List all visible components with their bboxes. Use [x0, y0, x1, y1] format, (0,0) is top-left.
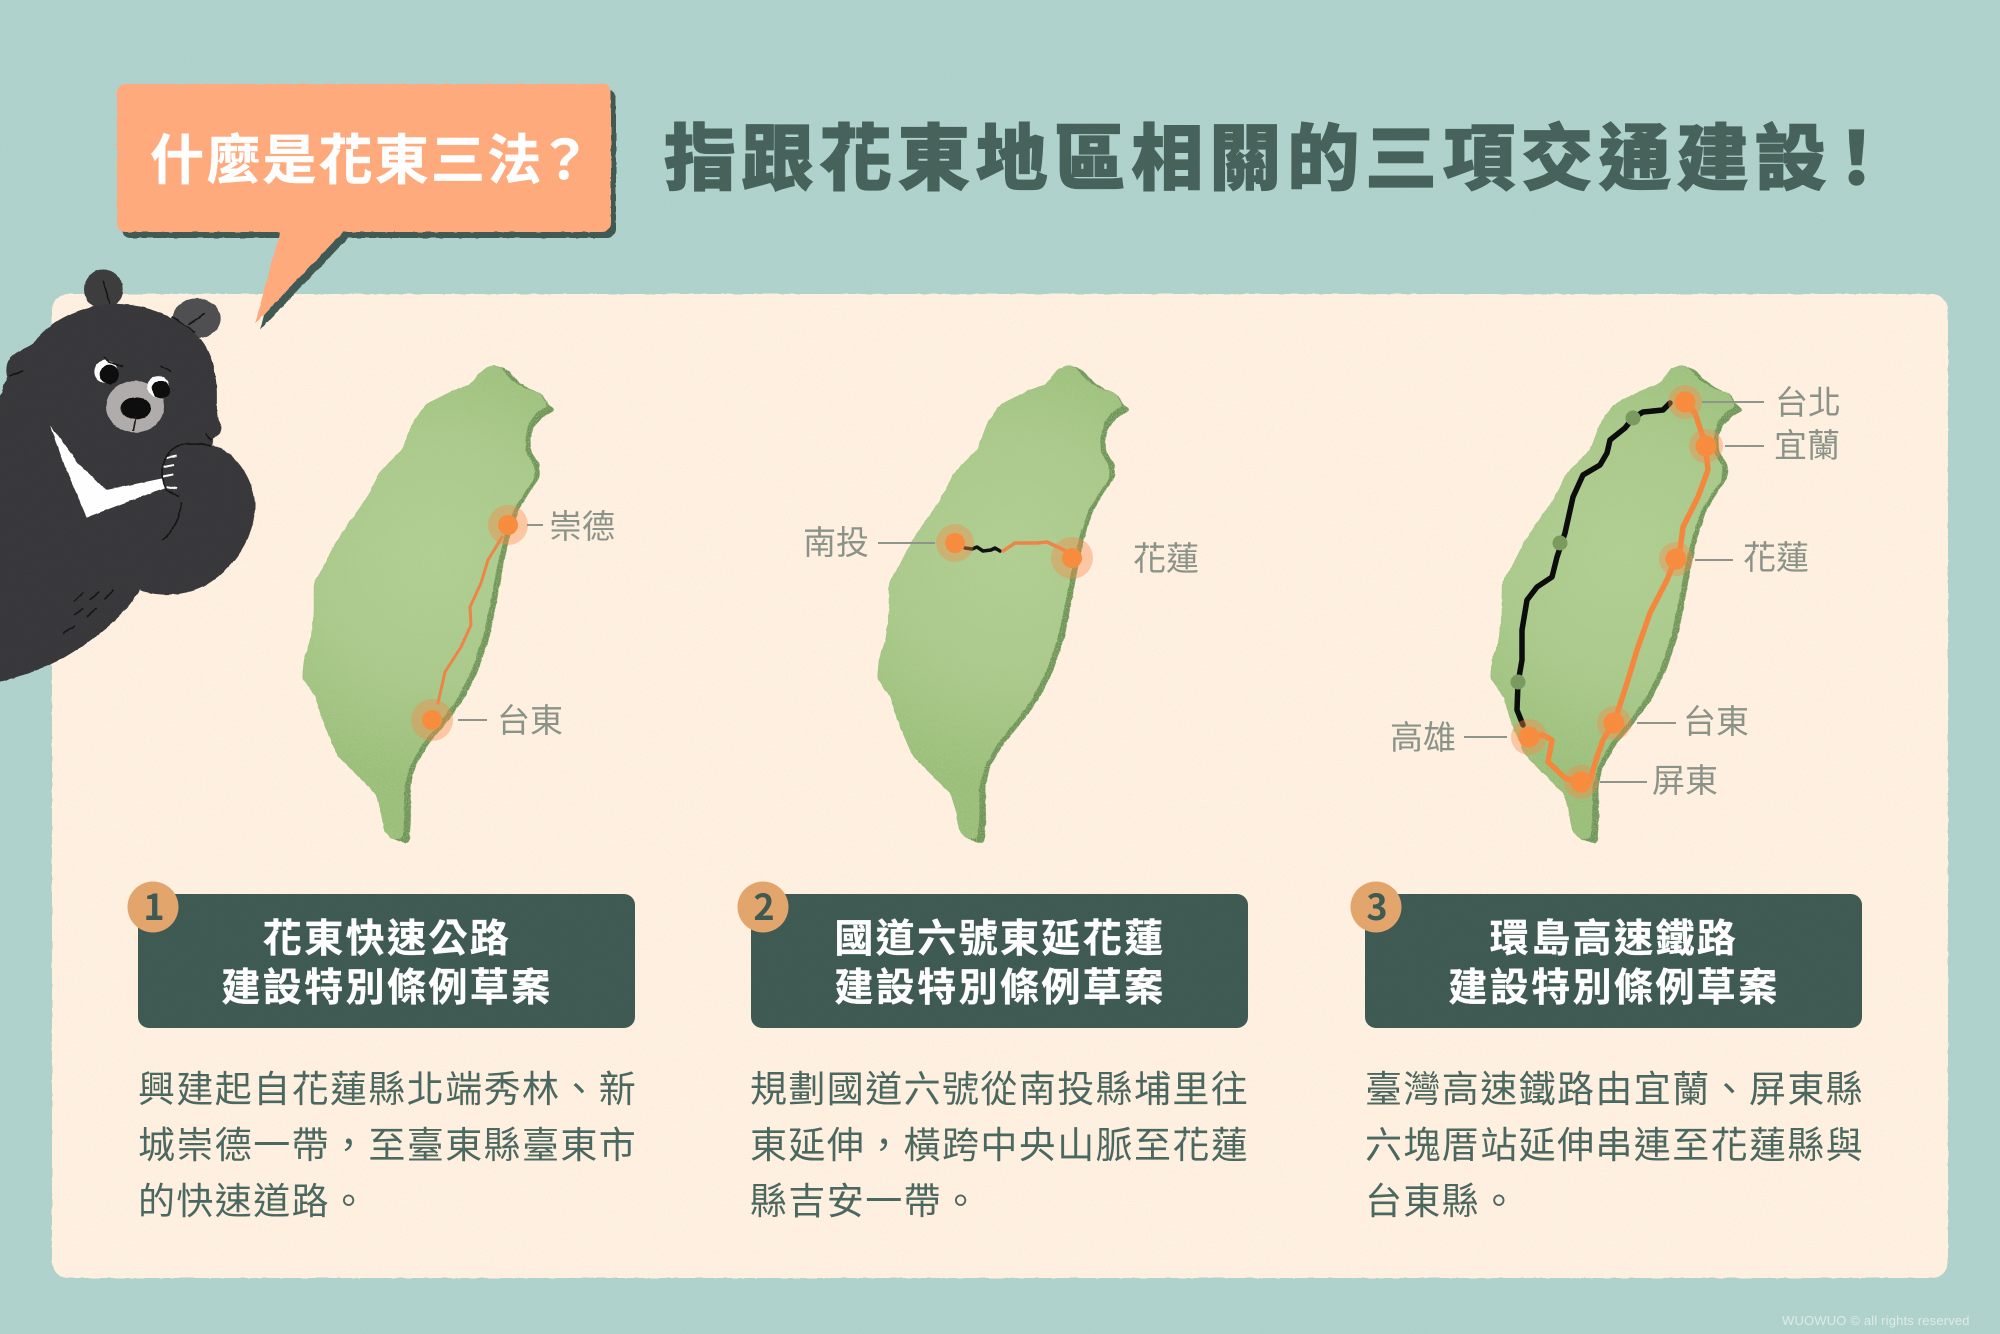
- badge 3: 3: [1366, 879, 1388, 931]
- label: 台東: 台東: [1683, 703, 1749, 740]
- marker: 高雄: [1511, 719, 1547, 755]
- label: 台北: [1702, 384, 1841, 421]
- column 1 heading box: 花東快速公路: [263, 918, 511, 961]
- label: 花蓮: 花蓮: [1743, 539, 1809, 576]
- copyright note: WUOWUO © all rights reserved: [1782, 1313, 1970, 1328]
- column 3 heading box: 建設特別條例草案: [1448, 967, 1780, 1010]
- route: west high speed rail: [1517, 403, 1670, 725]
- column 3 body text: [1365, 1069, 1864, 1222]
- column 2 body text: 縣吉安一帶。: [750, 1181, 980, 1222]
- bear head and body: [0, 304, 255, 685]
- bear paw lines and claws: [62, 444, 212, 633]
- route: 國道六號 tunnel section: [965, 547, 1000, 551]
- column 1 heading box: 建設特別條例草案: [221, 967, 553, 1010]
- label: 南投: 南投: [803, 524, 869, 561]
- bubble text: 什麼是花東三法？: [150, 131, 594, 191]
- route: 花東快速公路: [438, 537, 502, 703]
- badge 2: [738, 879, 788, 932]
- marker: 南投: [936, 524, 974, 562]
- main title: 指跟花東地區相關的三項交通建設！: [664, 120, 1898, 200]
- label: 花蓮: 花蓮: [1133, 540, 1199, 577]
- column 2 body text: 東延伸，橫跨中央山脈至花蓮: [750, 1125, 1249, 1166]
- column 1 body text: [138, 1069, 637, 1222]
- label: 台東: [1637, 703, 1749, 740]
- label: 高雄: 高雄: [1390, 719, 1456, 756]
- column 2 heading box: 建設特別條例草案: [834, 967, 1166, 1010]
- speech bubble: [117, 84, 616, 330]
- label: 花蓮: [1695, 539, 1809, 576]
- label: 宜蘭: 宜蘭: [1774, 427, 1840, 464]
- panel: map 3 Taiwan: [1390, 366, 1841, 843]
- label: 宜蘭: [1725, 427, 1840, 464]
- column 3 heading box: 環島高速鐵路: [1490, 918, 1738, 961]
- column 1 body text: 興建起自花蓮縣北端秀林、新: [138, 1069, 637, 1110]
- column 3 body text: 六塊厝站延伸串連至花蓮縣與: [1365, 1125, 1864, 1166]
- column 3 heading box: [1365, 894, 1862, 1028]
- illustration: black bear: [0, 269, 255, 685]
- panel: map 2 Taiwan: [803, 366, 1199, 843]
- column 1 body text: 城崇德一帶，至臺東縣臺東市: [138, 1125, 637, 1166]
- label: 南投: [803, 524, 935, 561]
- column 2 body text: 規劃國道六號從南投縣埔里往: [750, 1069, 1249, 1110]
- marker: 台東: [1597, 706, 1631, 740]
- label: 屏東: [1600, 762, 1718, 799]
- column 1 heading box: [138, 894, 635, 1028]
- panel: main content card: [52, 294, 1948, 1278]
- column 3 body text: 台東縣。: [1365, 1181, 1519, 1222]
- bear face: [9, 357, 212, 440]
- marker: 宜蘭: [1689, 429, 1723, 463]
- column 1 body text: 的快速道路。: [138, 1181, 368, 1222]
- label: 高雄: [1390, 719, 1507, 756]
- column 2 heading box: [751, 894, 1248, 1028]
- label: 台東: [458, 702, 563, 739]
- route: east extension: [1530, 402, 1708, 783]
- marker: 台北: [1668, 385, 1702, 419]
- badge 1: [128, 879, 178, 932]
- marker: 花蓮: [1051, 537, 1093, 579]
- marker: 花蓮: [1659, 542, 1693, 576]
- bear ears: [84, 269, 221, 338]
- marker: 崇德: [488, 505, 528, 545]
- stations on rail: [1510, 410, 1640, 690]
- bear chest V mark: [51, 426, 166, 517]
- badge 1: 1: [143, 879, 165, 931]
- marker: 屏東: [1564, 765, 1598, 799]
- column 2 body text: [750, 1069, 1249, 1222]
- label: 台東: 台東: [497, 702, 563, 739]
- badge 3: [1350, 879, 1402, 932]
- route: 國道六號 east section: [1003, 542, 1064, 551]
- panel: map 1 Taiwan: [303, 366, 615, 843]
- badge 2: 2: [753, 879, 775, 931]
- label: 崇德: 崇德: [549, 508, 615, 545]
- label: 屏東: 屏東: [1652, 762, 1718, 799]
- label: 台北: 台北: [1775, 384, 1841, 421]
- column 2 heading box: 國道六號東延花蓮: [834, 918, 1166, 961]
- marker: 台東: [411, 699, 453, 741]
- column 3 body text: 臺灣高速鐵路由宜蘭、屏東縣: [1365, 1069, 1864, 1110]
